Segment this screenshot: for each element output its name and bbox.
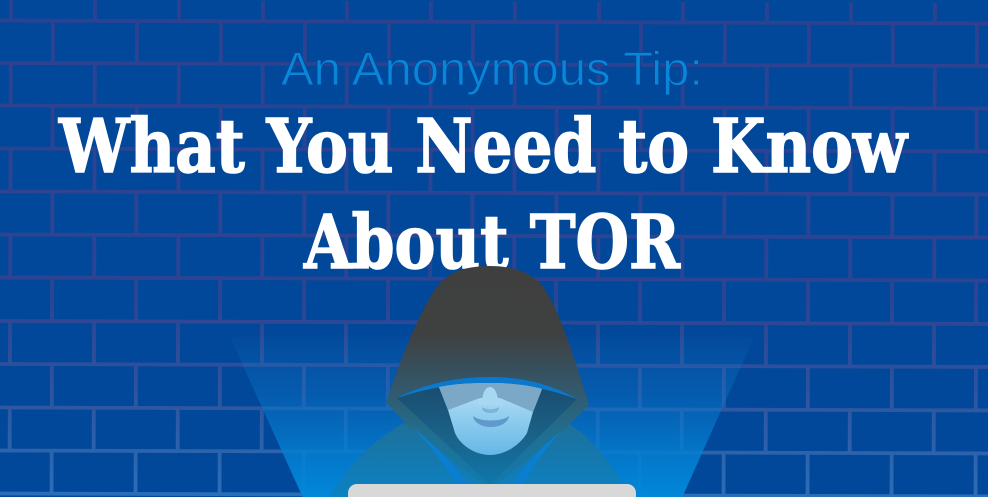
light beam from laptop <box>230 337 754 497</box>
under nose <box>482 407 499 413</box>
shoulders <box>328 420 632 497</box>
hood <box>386 266 589 490</box>
face upper shadow <box>439 383 542 412</box>
title: About TOR <box>303 200 680 286</box>
face <box>439 383 542 455</box>
nose <box>476 387 504 405</box>
title <box>58 104 909 286</box>
laptop <box>348 484 636 497</box>
mouth <box>473 416 509 427</box>
subtitle: An Anonymous Tip: <box>281 42 703 95</box>
hood opening shadow <box>397 383 577 485</box>
scarf folds <box>412 427 468 485</box>
hood rim highlight <box>397 377 577 399</box>
hooded hacker figure <box>328 266 632 497</box>
